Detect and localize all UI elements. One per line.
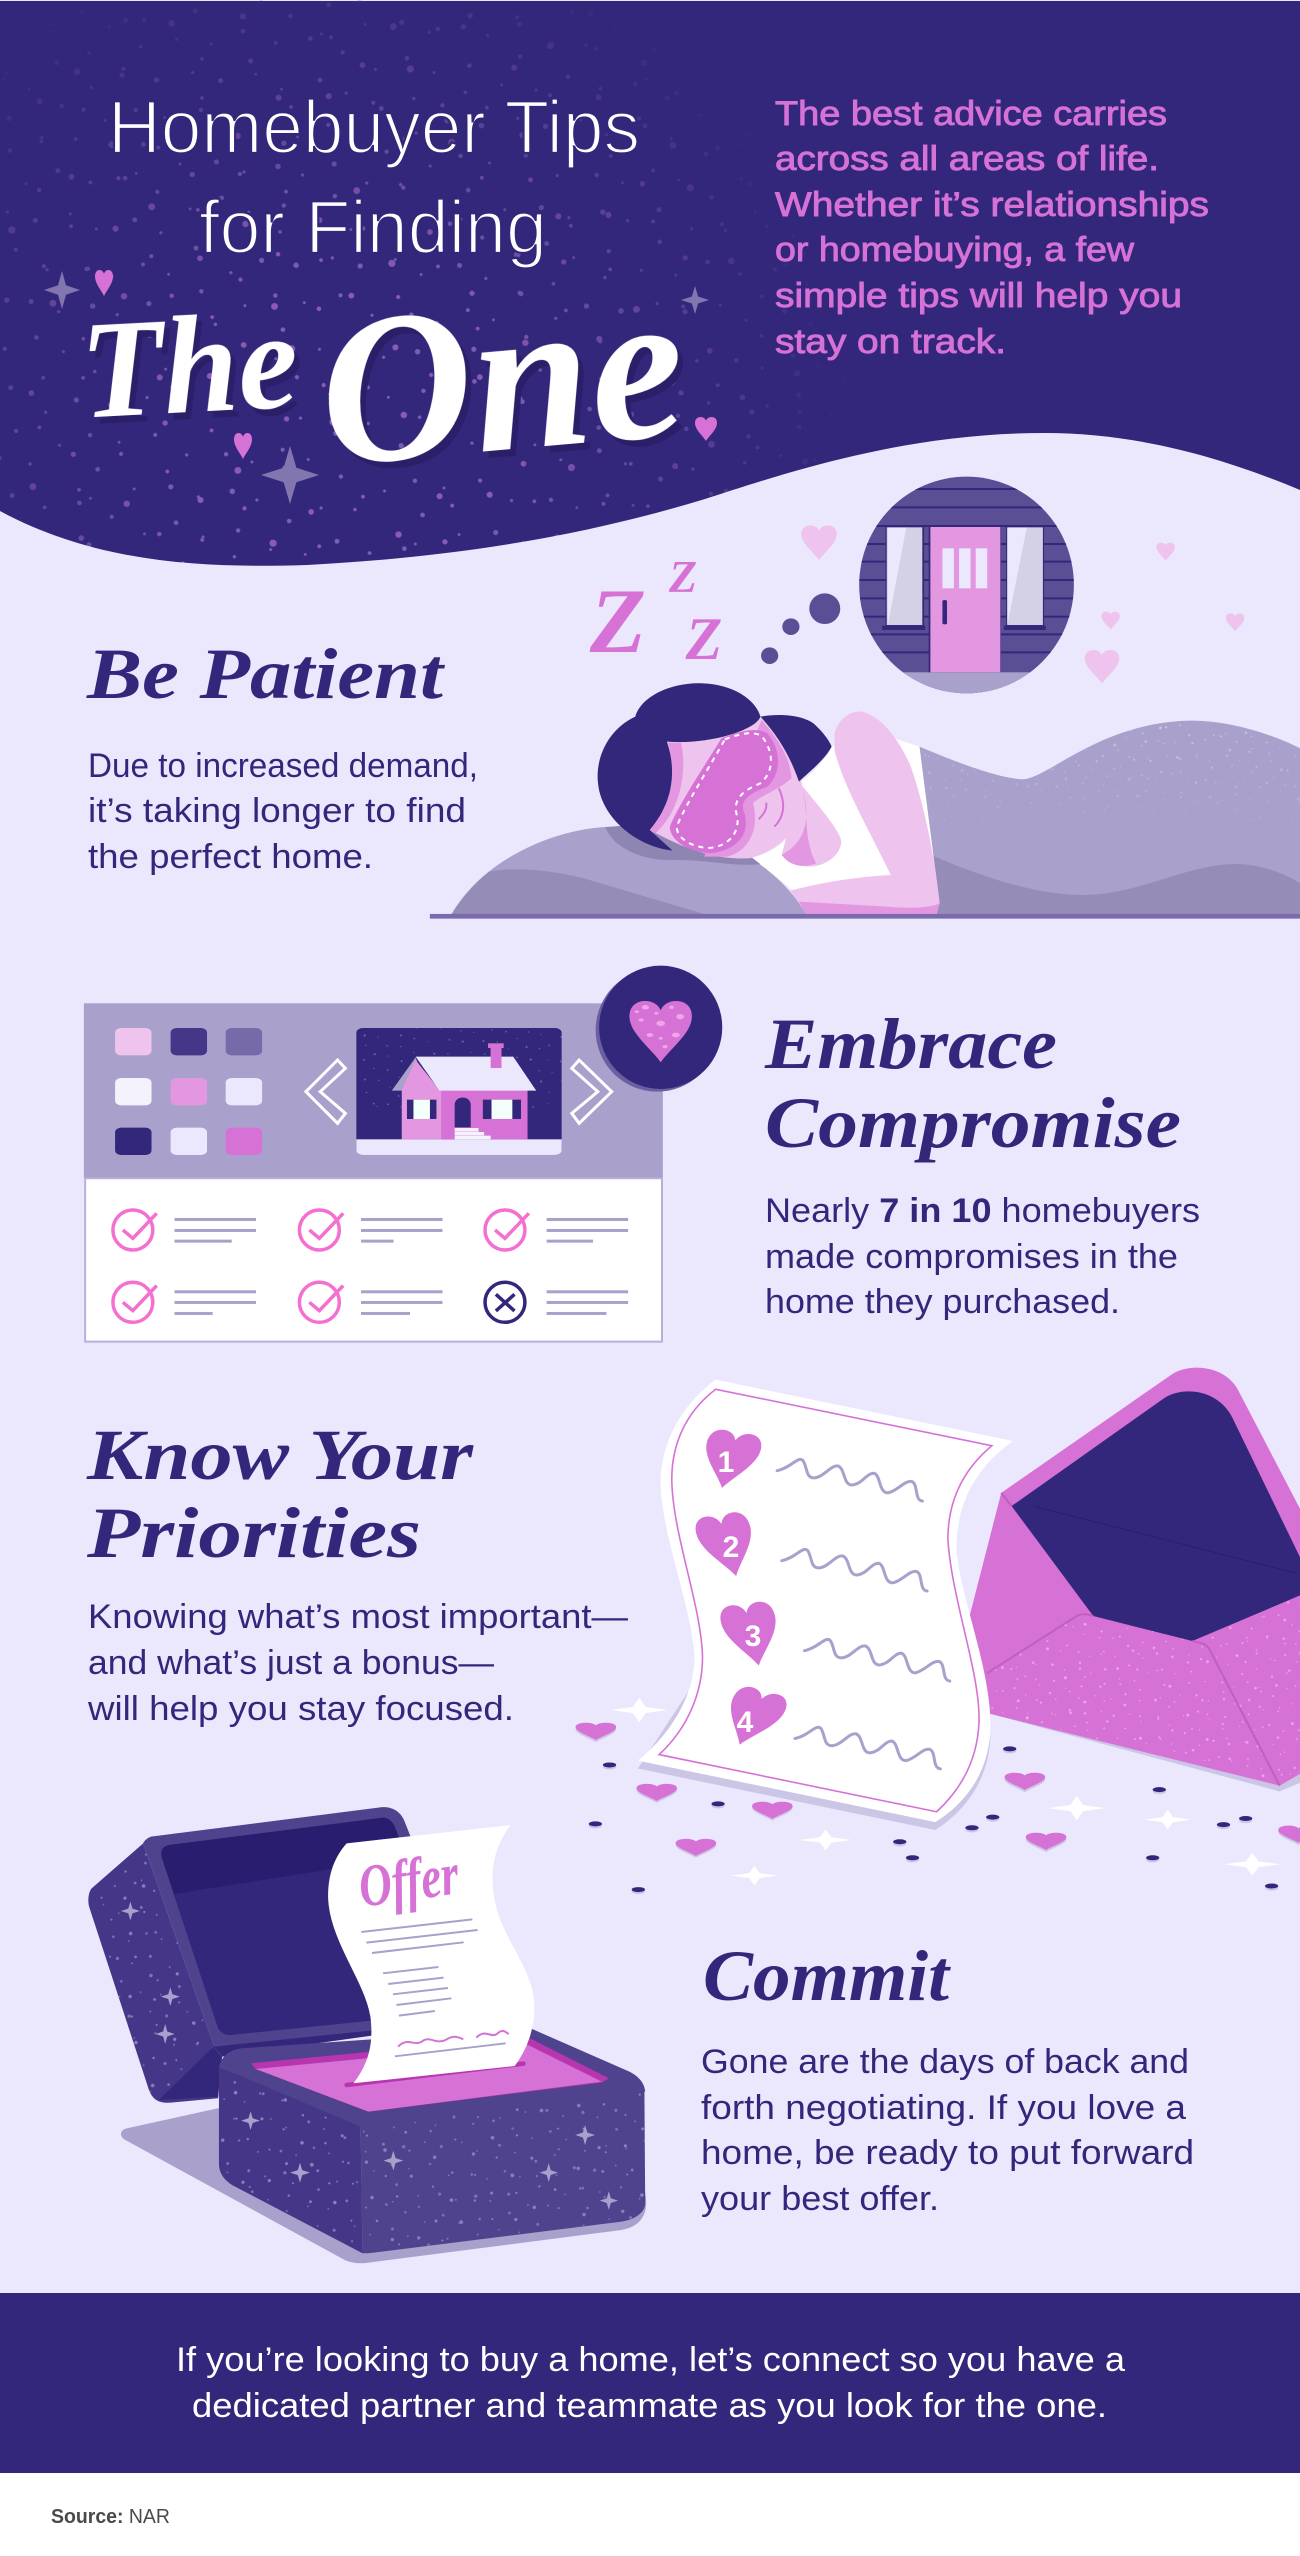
title: One: [310, 242, 693, 512]
illustration: offer letter in jewellery box: [88, 1807, 646, 2263]
checklist icons: checked: [113, 1210, 529, 1322]
panel: commit: [88, 1807, 1194, 2263]
panel: embrace compromise: [84, 966, 1200, 1342]
card body: [85, 1178, 662, 1342]
wave divider: [0, 433, 1300, 640]
intro text: [775, 95, 1209, 361]
body text: will help you stay focused.: [87, 1690, 514, 1728]
panel: header: [0, 0, 1300, 566]
body text: made compromises in the: [765, 1238, 1178, 1276]
title: for Finding: [199, 185, 547, 269]
confetti shadows: [576, 1725, 1300, 1894]
sleep Z letters: Z: [589, 570, 646, 672]
panel: be patient: [86, 473, 1300, 919]
woman: head with sleep mask: [598, 683, 832, 858]
card header: [84, 1003, 663, 1178]
body text: [88, 747, 478, 876]
body text: [87, 1598, 628, 1728]
body text: and what’s just a bonus—: [88, 1644, 494, 1682]
call to action text: dedicated partner and teammate as you look for the one.: [192, 2387, 1107, 2425]
title: The: [77, 282, 302, 449]
floor line: [430, 914, 1300, 919]
panel: closing call to action: [0, 2293, 1300, 2473]
listing photo of house: [356, 1028, 562, 1155]
illustration: sleeping woman dreaming of a home: [430, 473, 1300, 919]
body text: your best offer.: [701, 2180, 939, 2218]
listing card illustration: [84, 966, 722, 1342]
heading: Embrace: [764, 1004, 1057, 1084]
header night sky: [0, 1, 1300, 601]
intro text: across all areas of life.: [775, 140, 1159, 178]
heading: Commit: [703, 1936, 951, 2016]
heading: Be Patient: [86, 634, 445, 714]
heart numbers: 2: [723, 1531, 739, 1564]
body text: the perfect home.: [88, 838, 373, 876]
favourite heart badge: [596, 966, 722, 1092]
box base: [219, 2028, 645, 2253]
checklist text lines: [174, 1218, 628, 1315]
paper shadow: [638, 1671, 990, 1830]
arrow: next: [572, 1060, 612, 1123]
body text: [701, 2043, 1194, 2218]
checklist: [113, 1210, 628, 1322]
heart numbers: 4: [737, 1706, 754, 1739]
heading: [764, 1004, 1181, 1163]
blanket: [919, 721, 1300, 914]
body text: Due to increased demand,: [88, 747, 478, 785]
heading: Know Your: [86, 1415, 474, 1495]
body text: home, be ready to put forward: [701, 2134, 1194, 2172]
body text: home they purchased.: [765, 1283, 1120, 1321]
intro text: or homebuying, a few: [775, 231, 1134, 269]
call to action text: [176, 2341, 1125, 2425]
pillow: [452, 825, 806, 914]
intro text: The best advice carries: [775, 95, 1167, 133]
title: [77, 85, 693, 512]
sleep Z letters: Z: [685, 606, 722, 672]
numbered hearts: [692, 1428, 791, 1752]
intro text: Whether it’s relationships: [775, 186, 1209, 224]
paper inner border: [659, 1389, 992, 1812]
box sparkle stars: [121, 1902, 618, 2210]
offer letter lines: [361, 1919, 506, 2056]
heart numbers: 3: [745, 1620, 761, 1653]
star speckles: [0, 0, 808, 563]
body text: [765, 1192, 1200, 1321]
offer heading on letter: Offer: [355, 1840, 463, 1920]
confetti dots: [589, 1746, 1278, 1892]
arrow: previous: [306, 1060, 345, 1123]
heart numbers: [718, 1446, 761, 1739]
signature: [398, 2031, 509, 2047]
handwriting squiggles: [777, 1459, 950, 1769]
dream bubble with house door: [853, 473, 1083, 697]
body text: Knowing what’s most important—: [88, 1598, 628, 1636]
intro text: simple tips will help you: [775, 277, 1182, 315]
offer letter paper: [328, 1825, 534, 2083]
sparkle stars: [44, 271, 709, 504]
box shadow: [121, 2108, 646, 2263]
confetti stars: [611, 1697, 1281, 1886]
thought bubbles: [761, 593, 840, 664]
sleep Z letters: Z: [668, 551, 697, 602]
floating hearts: [801, 525, 1244, 683]
heading: Priorities: [86, 1493, 421, 1573]
call to action text: If you’re looking to buy a home, let’s connect so you have a: [176, 2341, 1125, 2379]
box lid: [88, 1807, 412, 2103]
colour swatches: [115, 1028, 262, 1155]
priority list paper: [638, 1380, 1013, 1822]
body text: Nearly 7 in 10 homebuyers: [765, 1192, 1200, 1230]
heart numbers: 1: [718, 1446, 734, 1479]
title: Homebuyer Tips: [108, 85, 640, 169]
body text: it’s taking longer to find: [88, 792, 466, 830]
footer band: [0, 2293, 1300, 2473]
sleep Z letters: [589, 551, 722, 672]
body text: forth negotiating. If you love a: [701, 2089, 1186, 2127]
illustration: love letter list and envelope: [576, 1368, 1300, 1894]
confetti: [576, 1697, 1300, 1894]
source note: Source: NAR: [51, 2506, 170, 2528]
panel: know your priorities: [86, 1368, 1300, 1894]
envelope: [970, 1368, 1300, 1791]
heading: [86, 1415, 474, 1573]
hearts: [95, 270, 717, 459]
intro text: stay on track.: [775, 323, 1006, 361]
woman: torso and arm: [750, 711, 940, 914]
confetti hearts: [576, 1723, 1300, 1856]
body text: Gone are the days of back and: [701, 2043, 1189, 2081]
heading: Compromise: [765, 1083, 1181, 1163]
checklist icon: crossed: [485, 1282, 525, 1322]
